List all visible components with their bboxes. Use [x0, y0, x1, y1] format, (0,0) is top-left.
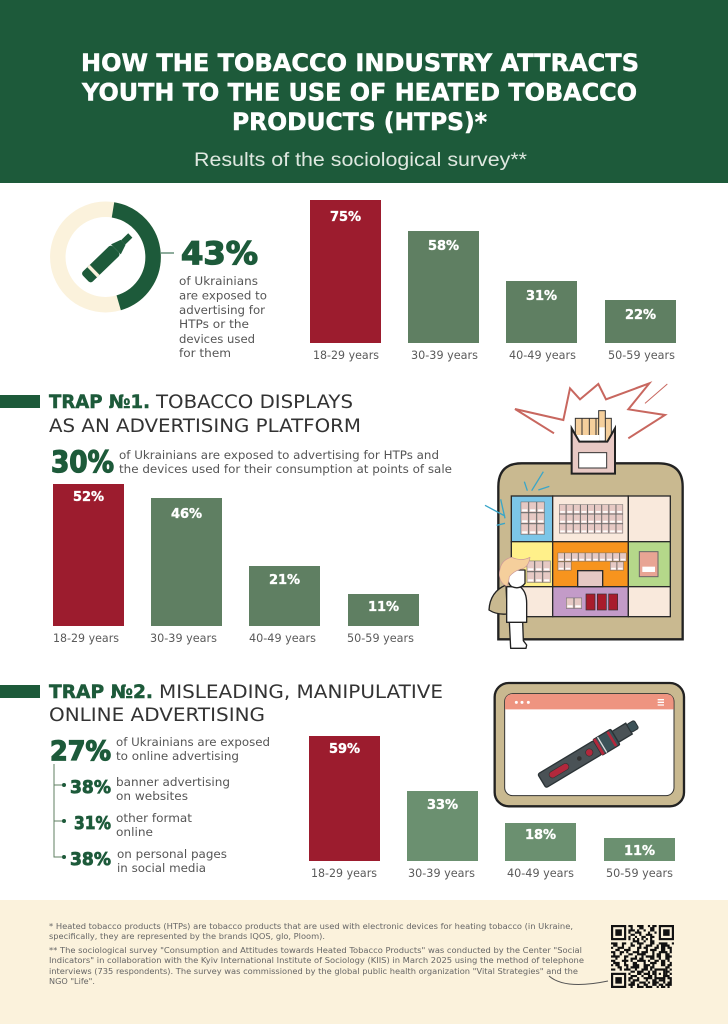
bar chart: exposure by age: 30-39 years	[411, 348, 478, 362]
stat: 43% of Ukrainians: are exposed to	[179, 288, 267, 302]
bar chart: exposure by age: 50-59 years	[608, 348, 675, 362]
heading: trap 1	[0, 392, 361, 437]
header band	[0, 0, 728, 183]
bar chart: exposure by age: 31%	[526, 289, 557, 304]
bar chart: online advertising by age: 59%	[329, 742, 360, 757]
stat: 43% of Ukrainians: devices used	[179, 332, 255, 346]
packs on shelves	[521, 502, 658, 610]
bar chart: points of sale by age: 50-59 years	[347, 631, 414, 645]
list: advertising formats: other format	[116, 811, 193, 825]
list: advertising formats: on websites	[116, 789, 188, 803]
bar chart: online advertising by age: 18-29 years	[311, 866, 377, 880]
cigarette pack	[572, 411, 615, 474]
stat: 27% online advertising: 27%	[50, 736, 111, 767]
browser bar	[505, 694, 674, 709]
bar chart: exposure by age: 22%	[625, 308, 656, 323]
QR code	[611, 925, 674, 988]
bar chart: online advertising by age: 40-49 years	[507, 866, 574, 880]
bar chart: exposure by age	[310, 200, 676, 362]
title	[81, 49, 639, 136]
subtitle: Results of the sociological survey**	[194, 150, 528, 171]
arrow to QR code	[549, 976, 608, 985]
burst outline	[515, 383, 667, 438]
heading: trap 2	[0, 682, 443, 726]
stat: 30% at points of sale	[51, 445, 452, 479]
bar chart: online advertising by age: 33%	[427, 798, 458, 813]
cabinet	[498, 463, 683, 639]
donut chart: 43%	[58, 209, 174, 305]
bar chart: points of sale by age: 18-29 years	[53, 631, 119, 645]
shelf grid	[511, 496, 670, 617]
list: advertising formats: 38%	[70, 777, 111, 798]
list: advertising formats	[54, 764, 230, 875]
bar chart: points of sale by age	[53, 484, 419, 645]
stat: 43% of Ukrainians: HTPs or the	[179, 317, 249, 331]
heading: trap 1: TOBACCO DISPLAYS	[155, 392, 353, 413]
list: advertising formats: banner advertising	[116, 775, 230, 789]
list: advertising formats: online	[116, 825, 153, 839]
stat: 30% at points of sale: the devices used for their consumption at points of sale	[119, 462, 452, 476]
bar chart: points of sale by age: 21%	[269, 573, 300, 588]
stat: 27% online advertising: of Ukrainians are exposed	[116, 735, 270, 749]
title: PRODUCTS (HTPS)*	[232, 108, 487, 136]
stat: 30% at points of sale: of Ukrainians are exposed to advertising for HTPs and	[119, 448, 439, 462]
footnotes: ** The sociological survey "Consumption and Attitudes towards Heated Tobacco Products" was conducted by the Center "Social	[49, 945, 582, 955]
bar chart: points of sale by age: 46%	[171, 507, 202, 522]
bar chart: exposure by age: 58%	[428, 239, 459, 254]
stat: 43% of Ukrainians: for them	[179, 346, 231, 360]
illustration: tobacco display with boy	[485, 383, 683, 648]
bar chart: online advertising by age	[309, 736, 675, 880]
icon: heated tobacco stick	[81, 230, 135, 284]
stat: 43% of Ukrainians: advertising for	[179, 303, 265, 317]
footer panel	[0, 900, 728, 1024]
title: YOUTH TO THE USE OF HEATED TOBACCO	[81, 78, 637, 106]
bar chart: exposure by age: 18-29 years	[313, 348, 379, 362]
list: advertising formats: 31%	[74, 813, 111, 834]
footnotes	[49, 921, 584, 986]
footnotes: NGO "Life".	[49, 976, 95, 986]
heading: trap 2: TRAP №2.	[49, 682, 153, 703]
bar chart: points of sale by age: 52%	[73, 490, 104, 505]
bar chart: points of sale by age: 11%	[368, 600, 399, 615]
bar chart: exposure by age: 40-49 years	[509, 348, 576, 362]
list: advertising formats: on personal pages	[117, 847, 227, 861]
heading: trap 2: MISLEADING, MANIPULATIVE	[159, 682, 443, 703]
list: advertising formats: 38%	[70, 849, 111, 870]
stat: 43% of Ukrainians: 43%	[181, 236, 258, 272]
heading: trap 1: AS AN ADVERTISING PLATFORM	[49, 416, 361, 437]
bar chart: points of sale by age: 40-49 years	[249, 631, 316, 645]
attention marks	[485, 472, 549, 525]
stat: 43% of Ukrainians	[179, 236, 267, 360]
illustration: browser with vape device	[495, 683, 684, 806]
footnotes: * Heated tobacco products (HTPs) are tobacco products that are used with electronic devices for heating tobacco (in Ukraine,	[49, 921, 573, 931]
stat: 43% of Ukrainians: of Ukrainians	[179, 274, 258, 288]
bar chart: exposure by age: 75%	[330, 210, 361, 225]
bar chart: online advertising by age: 11%	[624, 844, 655, 859]
stat: 30% at points of sale: 30%	[51, 445, 114, 479]
bar chart: online advertising by age: 30-39 years	[408, 866, 475, 880]
list: advertising formats: in social media	[117, 861, 206, 875]
bar chart: online advertising by age: 18%	[525, 828, 556, 843]
stat: 27% online advertising: to online advertising	[116, 749, 239, 763]
heading: trap 2: ONLINE ADVERTISING	[49, 705, 265, 726]
vape device	[537, 716, 641, 789]
stat: 27% online advertising	[50, 735, 270, 767]
footnotes: Indicators" in collaboration with the Kyiv International Institute of Sociology (KIIS) in March 2025 using the method of telephone	[49, 955, 584, 965]
footnotes: specifically, they are represented by the brands IQOS, glo, Ploom).	[49, 931, 325, 941]
bar chart: points of sale by age: 30-39 years	[150, 631, 217, 645]
title: HOW THE TOBACCO INDUSTRY ATTRACTS	[81, 49, 639, 77]
heading: trap 1: TRAP №1.	[49, 392, 150, 413]
footnotes: interviews (735 respondents). The survey was commissioned by the global public health organization "Vital Strategies" and the	[49, 966, 578, 976]
bar chart: online advertising by age: 50-59 years	[606, 866, 673, 880]
boy	[489, 557, 530, 648]
